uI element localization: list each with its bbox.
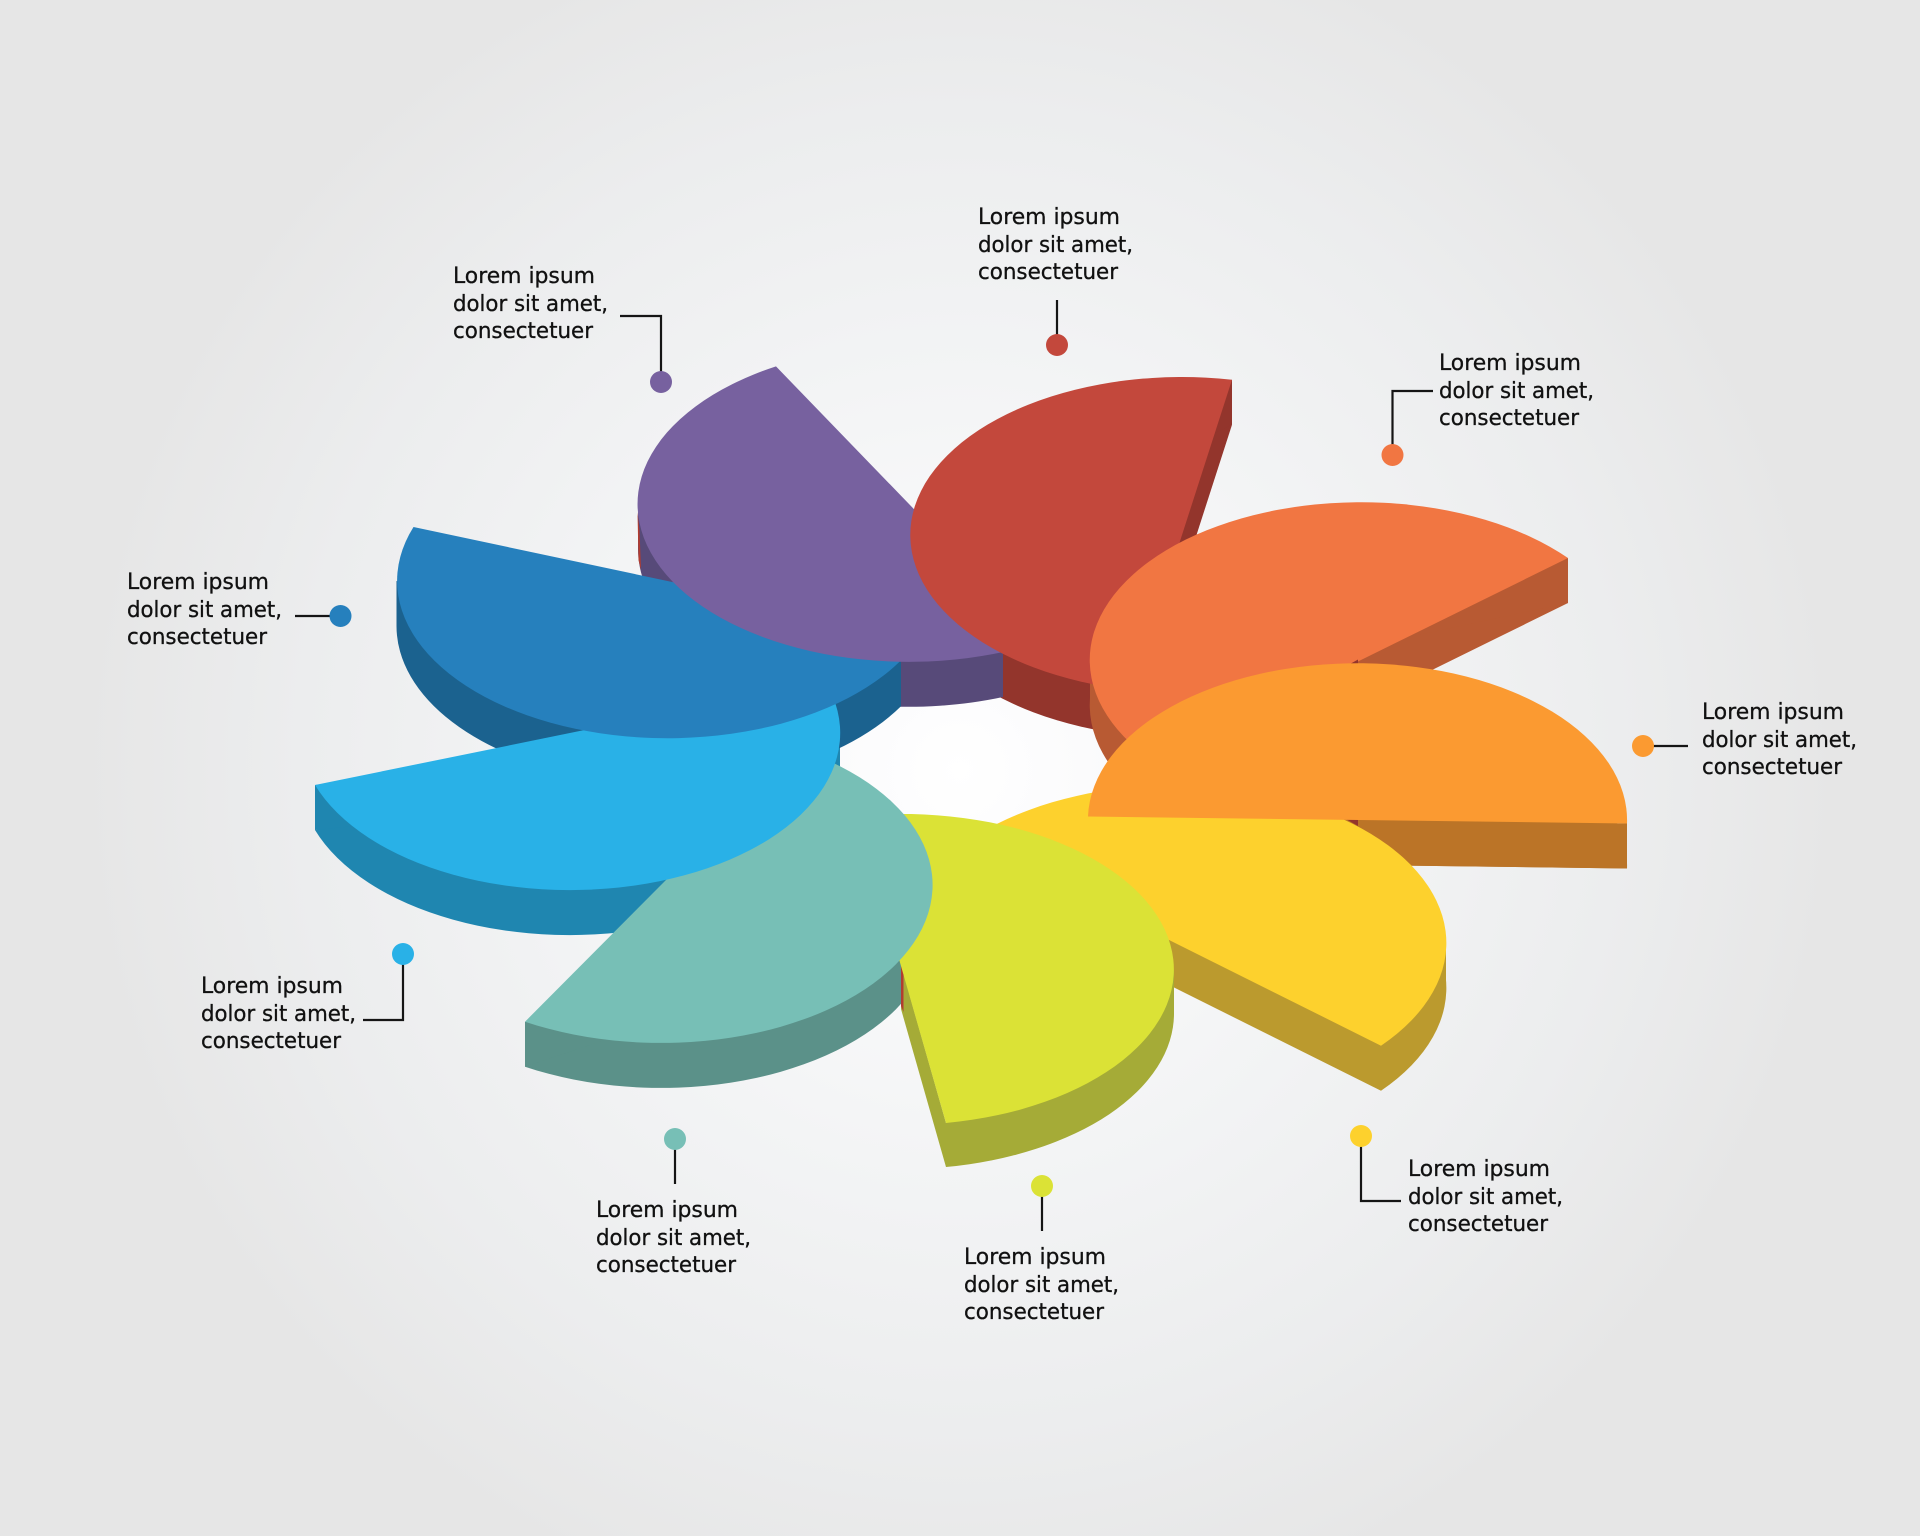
side: coral — [1090, 547, 1568, 807]
label: consectetuer — [964, 1300, 1105, 1325]
label: Lorem ipsum — [127, 570, 269, 595]
top: teal — [525, 748, 933, 1043]
callout: blue — [127, 570, 352, 650]
label: dolor sit amet, — [1408, 1185, 1563, 1210]
red slivers beside the purple and lime side faces — [638, 512, 904, 1012]
callout: lime — [964, 1175, 1119, 1325]
leader line — [295, 615, 332, 617]
small dark slivers behind the orange wedge — [1344, 660, 1358, 826]
dot — [1046, 334, 1068, 356]
label: Lorem ipsum — [1408, 1157, 1550, 1182]
label: Lorem ipsum — [201, 974, 343, 999]
leader line — [1041, 1195, 1043, 1231]
dot — [1031, 1175, 1053, 1197]
dot — [1632, 735, 1654, 757]
top: orange — [1088, 663, 1627, 824]
label: dolor sit amet, — [453, 292, 608, 317]
side: red — [910, 380, 1232, 735]
leader line — [1392, 391, 1433, 446]
label: dolor sit amet, — [964, 1273, 1119, 1298]
top faces of wedges — [315, 366, 1627, 1123]
callout: teal — [596, 1128, 751, 1278]
side: orange — [1088, 708, 1627, 868]
label: dolor sit amet, — [1702, 728, 1857, 753]
label: dolor sit amet, — [596, 1226, 751, 1251]
side: purple — [638, 504, 1003, 707]
label: Lorem ipsum — [596, 1198, 738, 1223]
dot — [330, 605, 352, 627]
callout: orange — [1632, 700, 1857, 780]
callout: purple — [453, 264, 672, 393]
leader line — [1056, 300, 1058, 336]
side: blue — [396, 581, 901, 784]
label: consectetuer — [978, 260, 1119, 285]
label: consectetuer — [1439, 406, 1580, 431]
label: Lorem ipsum — [1702, 700, 1844, 725]
dot — [650, 371, 672, 393]
side faces of wedges — [315, 380, 1627, 1167]
label: consectetuer — [1408, 1212, 1549, 1237]
label: dolor sit amet, — [127, 598, 282, 623]
label: consectetuer — [201, 1029, 342, 1054]
callout: coral — [1382, 351, 1594, 466]
top: coral — [1090, 502, 1568, 762]
label: dolor sit amet, — [978, 233, 1133, 258]
top: lime — [858, 814, 1174, 1123]
dot — [1350, 1125, 1372, 1147]
label: Lorem ipsum — [978, 205, 1120, 230]
leader line — [363, 963, 403, 1020]
label: dolor sit amet, — [1439, 379, 1594, 404]
label: consectetuer — [127, 625, 268, 650]
dot — [664, 1128, 686, 1150]
side: yellow — [969, 830, 1446, 1091]
label: consectetuer — [596, 1253, 737, 1278]
label: consectetuer — [453, 319, 594, 344]
callout: yellow — [1350, 1125, 1563, 1237]
callout: sky blue — [201, 943, 414, 1054]
label: consectetuer — [1702, 755, 1843, 780]
top: blue — [397, 527, 922, 738]
dot — [392, 943, 414, 965]
label: Lorem ipsum — [453, 264, 595, 289]
label: Lorem ipsum — [1439, 351, 1581, 376]
leader line — [674, 1148, 676, 1184]
top: yellow — [969, 785, 1446, 1046]
top: purple — [638, 366, 1042, 662]
side: teal — [525, 793, 933, 1088]
leader line — [1361, 1145, 1401, 1201]
side: sky blue — [315, 726, 840, 935]
top: sky blue — [315, 681, 840, 890]
label: dolor sit amet, — [201, 1002, 356, 1027]
side: lime — [901, 965, 1174, 1167]
callout: red — [978, 205, 1133, 356]
label: Lorem ipsum — [964, 1245, 1106, 1270]
leader line — [620, 316, 661, 372]
leader line — [1652, 745, 1688, 747]
top: red — [910, 377, 1232, 690]
dot — [1382, 444, 1404, 466]
